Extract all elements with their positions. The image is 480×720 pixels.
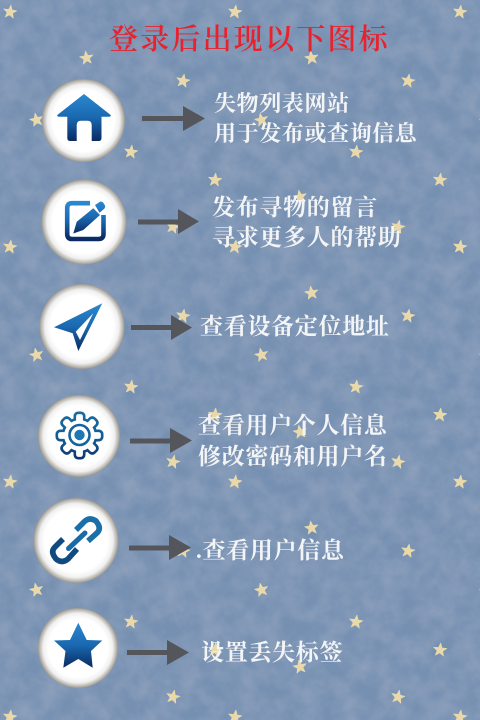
text: row 1: 用于发布或查询信息 — [214, 121, 419, 146]
text: row 6: 设置丢失标签 — [201, 640, 343, 665]
row 1: home — [42, 79, 419, 162]
row 6: star — [38, 608, 343, 688]
title: 登录后出现以下图标 — [109, 23, 390, 56]
text: row 4: 查看用户个人信息 — [198, 413, 389, 438]
text: row 1: 失物列表网站 — [214, 91, 350, 116]
icon: edit button — [42, 180, 126, 264]
text: row 5: .查看用户信息 — [196, 538, 346, 563]
arrow — [138, 209, 199, 234]
row 2: edit — [42, 180, 402, 264]
arrow — [129, 535, 191, 560]
text: row 2: 寻求更多人的帮助 — [212, 225, 402, 250]
arrow — [130, 428, 192, 453]
icon: home button — [42, 79, 125, 162]
text: row 2: 发布寻物的留言 — [212, 195, 378, 220]
icon: star button — [38, 608, 118, 688]
arrow — [142, 106, 205, 131]
text: row 4: 修改密码和用户名 — [198, 443, 388, 469]
row 4: settings — [38, 395, 389, 477]
row 3: navigation — [40, 284, 390, 369]
arrow — [131, 315, 192, 340]
icon: navigation button — [40, 284, 124, 369]
icon: link button — [34, 498, 118, 583]
arrow — [127, 640, 189, 665]
text: row 3: 查看设备定位地址 — [200, 314, 390, 339]
row 5: link — [34, 498, 346, 583]
icon: settings button — [38, 395, 120, 477]
